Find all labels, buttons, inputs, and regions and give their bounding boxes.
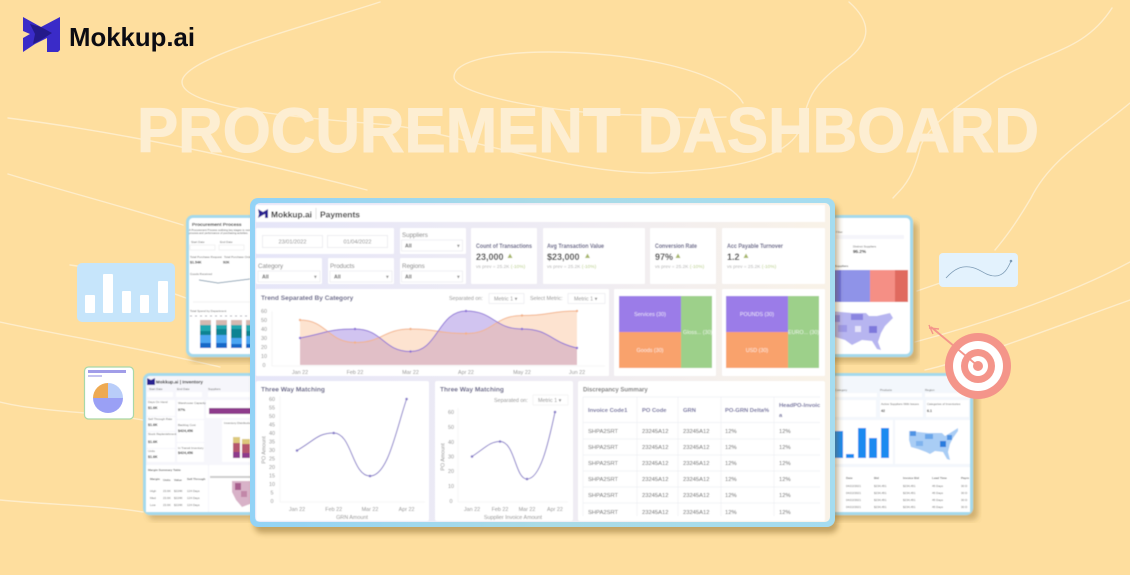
icon: bar chart card bbox=[77, 263, 175, 322]
panel: spend dashboard: Bid bbox=[874, 476, 879, 480]
chart: three way matching GRN: GRN Amount bbox=[336, 515, 368, 521]
filter: category bbox=[256, 258, 322, 284]
table: discrepancy summary: 12% bbox=[779, 445, 791, 451]
chart: three way matching supplier invoice: Apr 22 bbox=[547, 507, 563, 513]
panel: inventory dashboard: In Transit Inventory bbox=[178, 446, 204, 450]
chart: three way matching supplier invoice: PO Amount bbox=[440, 443, 446, 471]
filter: suppliers: All bbox=[405, 244, 412, 250]
panel: spend dashboard: Category bbox=[835, 388, 848, 392]
filter: products: All bbox=[334, 274, 341, 280]
panel: inventory dashboard: $224K bbox=[174, 496, 183, 500]
panel: spend dashboard: $234,451 bbox=[874, 491, 887, 495]
panel: spend dashboard: 30 D bbox=[961, 505, 968, 509]
panel: spend dashboard: $234,451 bbox=[903, 498, 916, 502]
panel: spend dashboard: 45 Days bbox=[932, 498, 944, 502]
panel: spend dashboard: 04/22/2021 bbox=[846, 505, 861, 509]
panel: spend dashboard: $234,451 bbox=[903, 484, 916, 488]
series: orange area bbox=[300, 311, 577, 365]
series: purple area bbox=[300, 311, 577, 365]
table: discrepancy summary: 23245A12 bbox=[642, 510, 668, 516]
filter: category: Category bbox=[258, 263, 284, 270]
kpi: conversion rate: vs prev = 25.2K (-10%) bbox=[655, 264, 705, 270]
panel: procurement process dashboard: Start Date bbox=[191, 240, 205, 244]
chart: trend separated by category: May 22 bbox=[513, 370, 531, 376]
panel: inventory dashboard: Low bbox=[150, 503, 156, 507]
chart: trend separated by category: Trend Separated By Category bbox=[261, 295, 354, 302]
table: discrepancy summary: 23245A12 bbox=[642, 493, 668, 499]
panel: spend dashboard: 6.1 bbox=[927, 409, 932, 413]
panel: spend dashboard: $234,451 bbox=[903, 491, 916, 495]
panel: spend dashboard: Active Suppliers With Issues bbox=[881, 402, 919, 406]
panel: supplier dashboard: Distinct Suppliers bbox=[853, 244, 877, 248]
panel: inventory dashboard: Margin bbox=[150, 477, 160, 481]
kpi: count of transactions: 23,000 bbox=[476, 252, 504, 262]
table: discrepancy summary bbox=[578, 381, 825, 521]
chart: three way matching GRN: Apr 22 bbox=[399, 507, 415, 513]
kpi: acc payable turnover: Acc Payable Turnover bbox=[727, 244, 784, 250]
panel: inventory dashboard: Med bbox=[150, 496, 156, 500]
panel: procurement process dashboard: Total Purchase Orders bbox=[224, 255, 254, 259]
chart: three way matching GRN: Three Way Matching bbox=[261, 386, 325, 394]
chart: three way matching GRN: 0 bbox=[270, 499, 274, 505]
panel: inventory dashboard: 124 Days bbox=[187, 496, 200, 500]
panel: inventory dashboard: Mokkup.ai | Inventory bbox=[156, 380, 203, 384]
chart: trend separated by category: 60 bbox=[261, 309, 267, 315]
chart: trend separated by category: 40 bbox=[261, 327, 267, 333]
icon: target with arrow bbox=[929, 325, 1011, 399]
kpi: acc payable turnover: 1.2 bbox=[727, 252, 740, 262]
chart: three way matching supplier invoice: Jan 22 bbox=[464, 507, 480, 513]
chart: three way matching GRN: Jan 22 bbox=[289, 507, 305, 513]
treemap: currency: USD (30) bbox=[746, 348, 768, 354]
panel: inventory dashboard: Sell Through bbox=[187, 477, 206, 481]
table: discrepancy summary: 12% bbox=[725, 445, 737, 451]
filter: regions: Regions bbox=[402, 263, 425, 270]
chart: trend separated by category bbox=[256, 289, 609, 376]
chart: three way matching supplier invoice: 40 bbox=[448, 440, 454, 446]
panel: inventory dashboard: Units bbox=[163, 478, 171, 482]
panel: inventory dashboard: $1.6K bbox=[148, 423, 158, 427]
panel: supplier dashboard bbox=[825, 215, 918, 362]
chart: three way matching GRN: 50 bbox=[269, 414, 275, 420]
panel: inventory dashboard: Days On Hand bbox=[148, 400, 168, 404]
chart: three way matching supplier invoice: Supplier Invoice Amount bbox=[484, 515, 543, 521]
chart: three way matching supplier invoice: 20 bbox=[448, 469, 454, 475]
filter: regions bbox=[400, 258, 466, 284]
panel: spend dashboard: 45 Days bbox=[932, 484, 944, 488]
chart: trend separated by category: Metric 1 ▾ bbox=[574, 296, 598, 302]
panel: inventory dashboard: Warehouse Capacity bbox=[178, 401, 206, 405]
kpi: count of transactions: Count of Transactions bbox=[476, 244, 533, 250]
header bbox=[256, 205, 825, 222]
table: discrepancy summary: 23245A12 bbox=[642, 461, 668, 467]
chart: three way matching GRN: 10 bbox=[269, 482, 275, 488]
filter: suppliers bbox=[400, 228, 466, 254]
panel: spend dashboard: $234,451 bbox=[874, 498, 887, 502]
panel: spend dashboard: 04/22/2021 bbox=[846, 491, 861, 495]
icon: pie chart card bbox=[84, 367, 134, 419]
treemap: category: Services (30) bbox=[634, 312, 666, 318]
chart: trend separated by category: 30 bbox=[261, 336, 267, 342]
chart: trend separated by category: 10 bbox=[261, 354, 267, 360]
panel: inventory dashboard: 23.6K bbox=[163, 496, 171, 500]
date filters bbox=[256, 228, 394, 254]
panel: procurement process dashboard bbox=[186, 215, 260, 362]
panel: inventory dashboard: $224K bbox=[174, 503, 183, 507]
table: discrepancy summary: Discrepancy Summary bbox=[583, 388, 648, 394]
table: discrepancy summary: SHPA2SRT bbox=[588, 429, 619, 435]
chart: trend separated by category: Jan 22 bbox=[292, 370, 308, 376]
chart: three way matching GRN: 15 bbox=[269, 474, 275, 480]
panel: inventory dashboard: $224K bbox=[174, 489, 183, 493]
chart: three way matching GRN: 40 bbox=[269, 431, 275, 437]
panel: inventory dashboard: End Date bbox=[177, 387, 190, 391]
chart: three way matching supplier invoice: Separated on: bbox=[494, 398, 528, 404]
chart: trend separated by category: Separated on: bbox=[449, 296, 483, 302]
table: discrepancy summary: 23245A12 bbox=[642, 445, 668, 451]
panel: spend dashboard: 30 D bbox=[961, 491, 968, 495]
panel: spend dashboard: Paym bbox=[961, 476, 969, 480]
table: discrepancy summary: 23245A12 bbox=[683, 445, 709, 451]
panel: spend dashboard bbox=[825, 373, 978, 520]
table: discrepancy summary: SHPA2SRT bbox=[588, 510, 619, 516]
table: discrepancy summary: 12% bbox=[779, 429, 791, 435]
table: discrepancy summary: SHPA2SRT bbox=[588, 445, 619, 451]
panel: inventory dashboard: $1.6K bbox=[148, 455, 158, 459]
panel: spend dashboard: $234,451 bbox=[874, 484, 887, 488]
table: discrepancy summary: 12% bbox=[725, 429, 737, 435]
table: discrepancy summary: 12% bbox=[725, 461, 737, 467]
panel: procurement process dashboard: process and performance of purchasing activities. bbox=[189, 231, 248, 235]
panel: inventory dashboard: High bbox=[150, 489, 157, 493]
kpi: avg transaction value: Avg Transaction Value bbox=[547, 244, 605, 250]
treemap: currency: POUNDS (30) bbox=[740, 312, 774, 318]
chart: three way matching supplier invoice: Mar 22 bbox=[519, 507, 535, 513]
header: Payments bbox=[320, 210, 360, 220]
chart: trend separated by category: Feb 22 bbox=[347, 370, 363, 376]
panel: spend dashboard: 30 D bbox=[961, 498, 968, 502]
chart: three way matching GRN: 20 bbox=[269, 465, 275, 471]
panel: spend dashboard: $234,451 bbox=[874, 505, 887, 509]
panel: spend dashboard: 45 Days bbox=[932, 491, 944, 495]
table: discrepancy summary: 12% bbox=[779, 477, 791, 483]
panel: spend dashboard: 04/22/2021 bbox=[846, 498, 861, 502]
kpi: count of transactions bbox=[471, 228, 537, 284]
panel: procurement process dashboard: Total Spend by Department bbox=[190, 309, 227, 313]
panel: spend dashboard: 30 D bbox=[961, 484, 968, 488]
chart: three way matching supplier invoice: 30 bbox=[448, 454, 454, 460]
panel: procurement process dashboard: Procurement Process bbox=[192, 222, 242, 228]
panel: procurement process dashboard: A Procurement Process outlining key stages to monitor the bbox=[189, 228, 259, 232]
chart: three way matching GRN bbox=[256, 381, 429, 521]
title: PROCUREMENT DASHBOARD bbox=[137, 96, 1039, 166]
table: discrepancy summary: HeadPO-Invoic bbox=[779, 403, 821, 409]
line: purple series bbox=[300, 311, 577, 352]
filter: products: Products bbox=[330, 263, 354, 270]
table: discrepancy summary: 23245A12 bbox=[642, 429, 668, 435]
panel: inventory dashboard: Suppliers bbox=[208, 387, 221, 391]
chart: three way matching GRN: 25 bbox=[269, 456, 275, 462]
panel: procurement process dashboard: 92K bbox=[223, 260, 230, 264]
panel: inventory dashboard: Sell Through Rate bbox=[148, 417, 172, 421]
chart: three way matching GRN: 60 bbox=[269, 397, 275, 403]
panel: inventory dashboard: $1.6K bbox=[148, 440, 158, 444]
panel: spend dashboard: Lead Time bbox=[932, 476, 947, 480]
panel: inventory dashboard: $1.6K bbox=[148, 406, 158, 410]
chart: three way matching GRN: Feb 22 bbox=[325, 507, 342, 513]
panel: procurement process dashboard: Total Purchase Request bbox=[190, 255, 222, 259]
table: discrepancy summary: SHPA2SRT bbox=[588, 461, 619, 467]
panel: procurement process dashboard: Goods Received bbox=[190, 272, 213, 276]
panel: spend dashboard: 45 Days bbox=[932, 505, 944, 509]
chart: trend separated by category: 50 bbox=[261, 318, 267, 324]
chart: trend separated by category: Select Metric: bbox=[530, 296, 563, 302]
table: discrepancy summary: GRN bbox=[683, 408, 696, 414]
treemap: category bbox=[614, 289, 716, 376]
panel: inventory dashboard: Backlog Cost bbox=[178, 423, 196, 427]
chart: three way matching supplier invoice: Feb 22 bbox=[492, 507, 508, 513]
filter: suppliers: Suppliers bbox=[402, 232, 428, 239]
chart: trend separated by category: 20 bbox=[261, 345, 267, 351]
panel: spend dashboard: Region bbox=[925, 388, 935, 392]
chart: trend separated by category: Jun 22 bbox=[569, 370, 585, 376]
panel: inventory dashboard: 23.6K bbox=[163, 489, 171, 493]
chart: trend separated by category: Metric 1 ▾ bbox=[494, 296, 518, 302]
filter: category: ▾ bbox=[314, 274, 317, 280]
panel: inventory dashboard: Inventory Distribution bbox=[224, 421, 253, 425]
table: discrepancy summary: 12% bbox=[725, 477, 737, 483]
panel: inventory dashboard: 124 Days bbox=[187, 503, 200, 507]
chart: trend separated by category: Mar 22 bbox=[402, 370, 419, 376]
panel: spend dashboard: 42 bbox=[881, 409, 885, 413]
chart: three way matching GRN: 30 bbox=[269, 448, 275, 454]
panel: inventory dashboard: 97% bbox=[178, 408, 186, 412]
table: discrepancy summary: 12% bbox=[725, 510, 737, 516]
panel: inventory dashboard: Stock Replenishment bbox=[148, 432, 177, 436]
chart: three way matching GRN: Mar 22 bbox=[362, 507, 378, 513]
chart: three way matching supplier invoice: 60 bbox=[448, 410, 454, 416]
panel: inventory dashboard: Units bbox=[148, 449, 155, 453]
icon: line chart card bbox=[939, 253, 1018, 287]
filter: category: All bbox=[262, 274, 269, 280]
table: discrepancy summary: 23245A12 bbox=[683, 510, 709, 516]
chart: three way matching supplier invoice: Three Way Matching bbox=[440, 386, 504, 394]
table: discrepancy summary: SHPA2SRT bbox=[588, 477, 619, 483]
panel: inventory dashboard: 23.6K bbox=[163, 503, 171, 507]
panel: inventory dashboard: Start Date bbox=[149, 387, 163, 391]
table: discrepancy summary: 12% bbox=[779, 493, 791, 499]
kpi: avg transaction value: $23,000 bbox=[547, 252, 580, 262]
panel: procurement process dashboard: $1.54K bbox=[190, 260, 202, 264]
table: discrepancy summary: 23245A12 bbox=[683, 477, 709, 483]
table: discrepancy summary: SHPA2SRT bbox=[588, 493, 619, 499]
panel: inventory dashboard: $424,456 bbox=[178, 429, 193, 433]
kpi: conversion rate: Conversion Rate bbox=[655, 244, 698, 250]
table: discrepancy summary: 12% bbox=[779, 510, 791, 516]
chart: three way matching supplier invoice: 0 bbox=[450, 499, 452, 505]
panel: main payments dashboard bbox=[250, 198, 838, 533]
panel: spend dashboard: Date bbox=[846, 476, 853, 480]
table: discrepancy summary: a bbox=[779, 413, 783, 419]
panel: supplier dashboard: of Suppliers bbox=[831, 264, 849, 268]
chart: three way matching GRN: 35 bbox=[269, 440, 275, 446]
kpi: conversion rate: 97% bbox=[655, 252, 673, 262]
date filters: 01/04/2022 bbox=[344, 240, 372, 246]
filter: products bbox=[328, 258, 394, 284]
kpi: acc payable turnover bbox=[722, 228, 825, 284]
kpi: count of transactions: vs prev = 25.2K (-10%) bbox=[476, 264, 526, 270]
treemap: currency bbox=[722, 289, 825, 376]
line: orange series bbox=[300, 311, 577, 342]
treemap: category: Goods (30) bbox=[637, 348, 664, 354]
chart: three way matching GRN: 55 bbox=[269, 406, 275, 412]
table: discrepancy summary: 23245A12 bbox=[683, 493, 709, 499]
treemap: category: Gloss... (30) bbox=[683, 330, 713, 336]
panel: spend dashboard: Categories of Inventories bbox=[927, 402, 961, 406]
kpi: conversion rate bbox=[650, 228, 716, 284]
panel: supplier dashboard: Filter bbox=[836, 230, 843, 234]
treemap: currency: EURO... (30) bbox=[788, 330, 819, 336]
chart: three way matching supplier invoice bbox=[435, 381, 573, 521]
table: discrepancy summary: 23245A12 bbox=[683, 461, 709, 467]
table: discrepancy summary: 23245A12 bbox=[642, 477, 668, 483]
table: discrepancy summary: PO-GRN Delta% bbox=[725, 408, 769, 414]
panel: spend dashboard: Products bbox=[880, 388, 892, 392]
panel: supplier dashboard: 95.2% bbox=[853, 249, 866, 254]
logo: Mokkup.ai bbox=[23, 17, 195, 52]
panel: inventory dashboard: Value bbox=[174, 478, 182, 482]
chart: trend separated by category: Apr 22 bbox=[458, 370, 474, 376]
chart: three way matching GRN: 5 bbox=[270, 490, 274, 496]
panel: inventory dashboard: $424,456 bbox=[178, 451, 193, 455]
chart: three way matching supplier invoice: Metric 1 ▾ bbox=[538, 398, 562, 404]
table: discrepancy summary: 12% bbox=[779, 461, 791, 467]
panel: spend dashboard: $234,451 bbox=[903, 505, 916, 509]
logo: Mokkup.ai: Mokkup.ai bbox=[69, 22, 195, 52]
header: Mokkup.ai bbox=[271, 210, 312, 220]
chart: three way matching GRN: PO Amount bbox=[262, 436, 268, 464]
kpi: avg transaction value: vs prev = 25.2K (-10%) bbox=[547, 264, 597, 270]
table: discrepancy summary: 23245A12 bbox=[683, 429, 709, 435]
chart: three way matching supplier invoice: 50 bbox=[448, 425, 454, 431]
table: discrepancy summary: 12% bbox=[725, 493, 737, 499]
kpi: acc payable turnover: vs prev = 25.2K (-10%) bbox=[727, 264, 777, 270]
chart: three way matching GRN: 45 bbox=[269, 422, 275, 428]
panel: procurement process dashboard: End Date bbox=[220, 240, 233, 244]
chart: three way matching supplier invoice: 10 bbox=[448, 484, 454, 490]
table: discrepancy summary: PO Code bbox=[642, 408, 667, 414]
filter: products: ▾ bbox=[386, 274, 389, 280]
panel: spend dashboard: Invoice Bid bbox=[903, 476, 919, 480]
date filters: 23/01/2022 bbox=[278, 240, 306, 246]
filter: regions: ▾ bbox=[457, 274, 460, 280]
kpi: avg transaction value bbox=[543, 228, 645, 284]
panel: spend dashboard: 04/22/2021 bbox=[846, 484, 861, 488]
panel: inventory dashboard: Margin Summary Table bbox=[148, 468, 181, 472]
panel: inventory dashboard: 124 Days bbox=[187, 489, 200, 493]
filter: regions: All bbox=[405, 274, 412, 280]
chart: trend separated by category: 0 bbox=[262, 363, 266, 369]
filter: suppliers: ▾ bbox=[457, 244, 460, 250]
table: discrepancy summary: Invoice Code1 bbox=[588, 408, 628, 414]
panel: inventory dashboard bbox=[143, 373, 258, 520]
